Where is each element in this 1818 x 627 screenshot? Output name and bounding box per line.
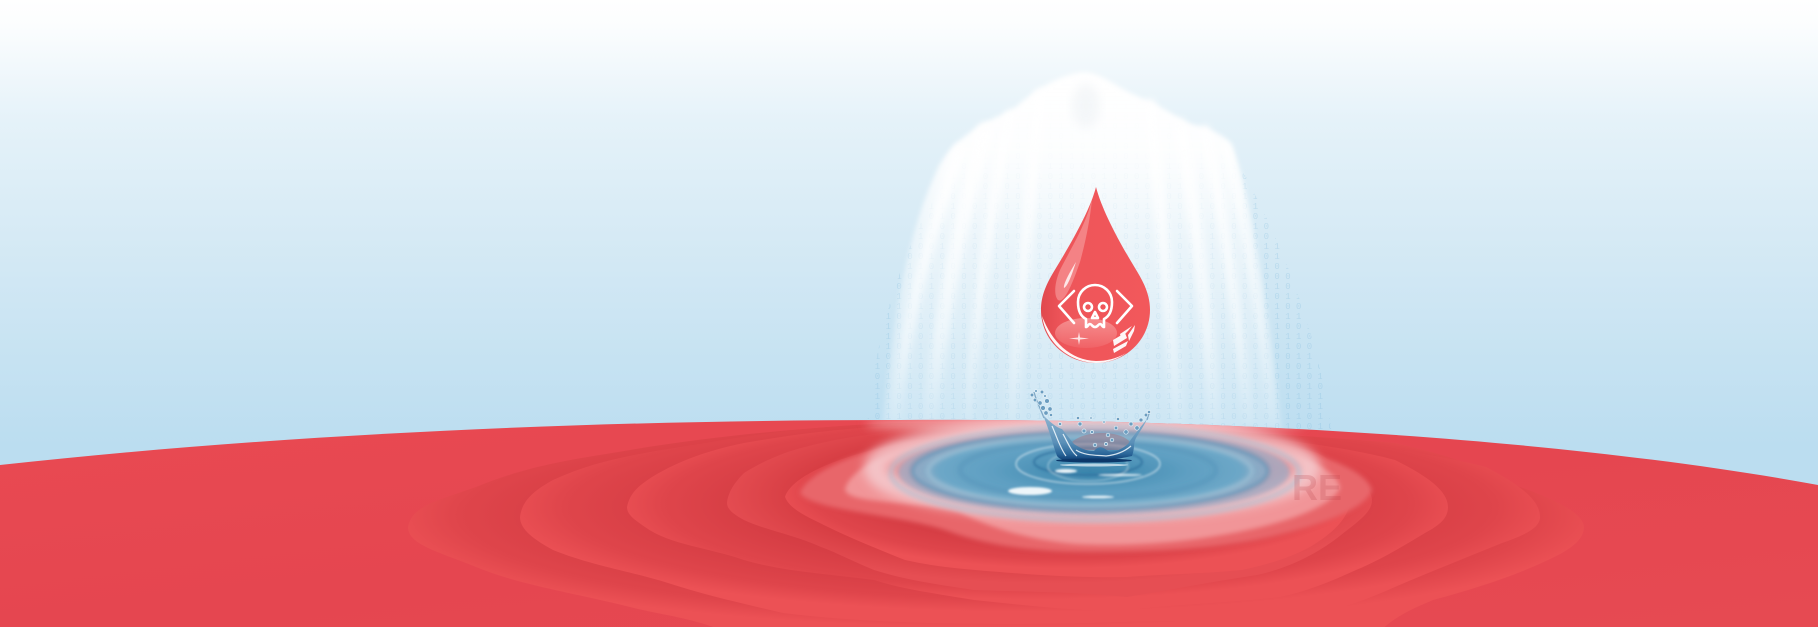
white spray curtain	[882, 72, 1282, 430]
window reflection	[1113, 325, 1135, 353]
faded top glow	[864, 420, 1302, 435]
droplets	[1030, 390, 1151, 447]
binary code rain	[867, 85, 1332, 435]
soft grey crest highlight	[1072, 84, 1100, 128]
blue water pool	[891, 426, 1299, 520]
water rings	[912, 433, 1268, 509]
strands	[1034, 392, 1150, 420]
sky background	[0, 0, 1818, 490]
white rim	[1042, 316, 1126, 363]
outer grey-blue ring	[891, 426, 1299, 520]
back rim	[1072, 433, 1130, 450]
ghost lettering: RE	[1292, 467, 1342, 508]
red liquid surface	[0, 410, 1818, 627]
crown highlights	[1052, 426, 1131, 456]
lower shine	[1055, 318, 1117, 348]
skull icon	[1059, 285, 1132, 327]
spray streaks	[895, 95, 1272, 420]
bright shine spot	[1064, 262, 1076, 288]
white fringe	[874, 426, 1310, 510]
drop body	[1041, 187, 1150, 363]
left shine	[1055, 199, 1092, 301]
red blood drop with skull icon	[1041, 187, 1150, 363]
water splash crown	[1030, 390, 1151, 466]
crown body	[1043, 415, 1147, 461]
sparkle	[1069, 332, 1089, 345]
outer halo	[800, 424, 1372, 552]
water glints	[1008, 469, 1142, 498]
pink halo	[845, 422, 1340, 545]
ripple bands	[470, 424, 1520, 627]
